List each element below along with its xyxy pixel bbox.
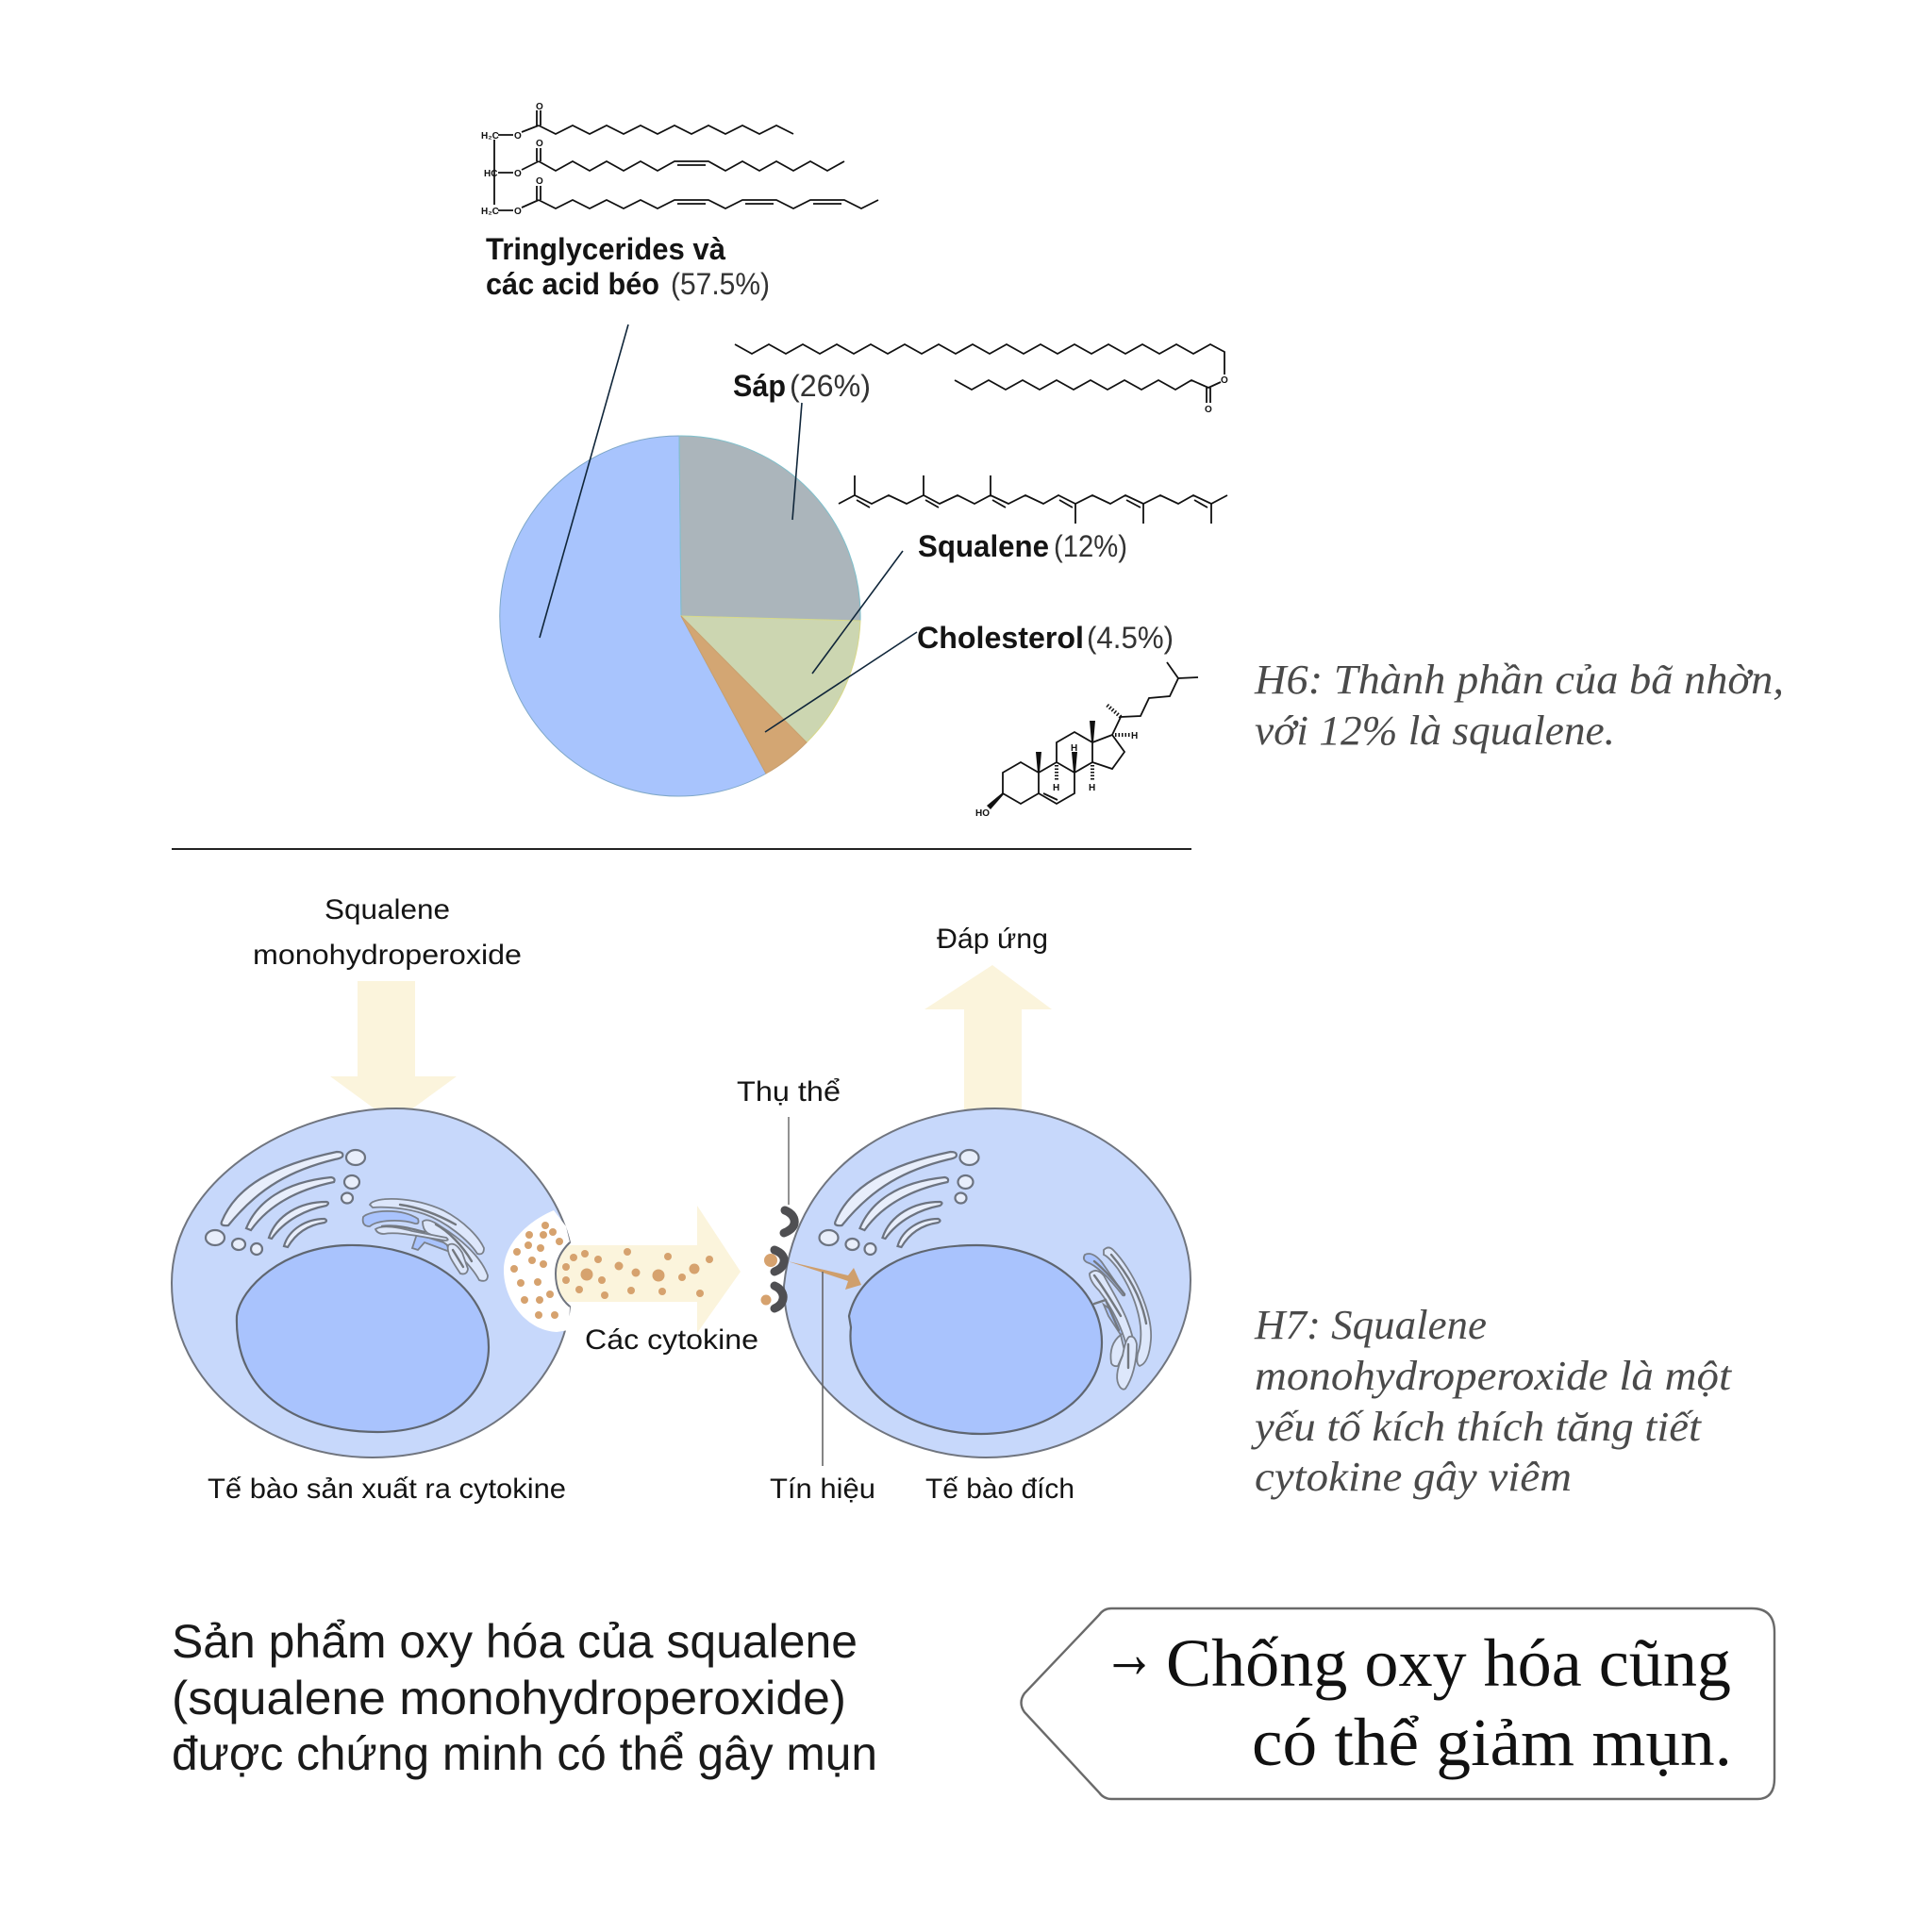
nucleus xyxy=(237,1245,489,1432)
slice: squalene 12% xyxy=(681,616,860,742)
chemical structure: cholesterol: H xyxy=(1071,743,1077,754)
leader lines xyxy=(540,325,917,732)
callout text: Chống oxy hóa cũng xyxy=(1166,1625,1731,1701)
golgi apparatus xyxy=(363,1199,488,1281)
caption: H6: với 12% là squalene. xyxy=(1255,708,1615,754)
label: triglycerides: các acid béo xyxy=(486,267,659,301)
callout text xyxy=(1103,1615,1732,1780)
label: wax xyxy=(733,369,871,403)
label: target cell: Tế bào đích xyxy=(925,1474,1074,1505)
slice: triglycerides 57.5% xyxy=(500,436,766,796)
receptors xyxy=(760,1210,794,1308)
cell body xyxy=(784,1108,1191,1457)
chemical structure: wax: O xyxy=(1221,375,1228,386)
chemical structure: cholesterol: H xyxy=(1053,783,1059,793)
label: squalene monohydroperoxide: Squalene xyxy=(325,894,450,925)
panel: sebum composition (H6) xyxy=(481,102,1784,819)
panel: cytokine signalling (H7) xyxy=(172,894,1733,1505)
label: signal: Tín hiệu xyxy=(770,1474,875,1505)
label: squalene xyxy=(918,529,1127,563)
arrow: response up xyxy=(924,965,1052,1123)
callout text: có thể giảm mụn. xyxy=(1252,1705,1732,1780)
callout text: → xyxy=(1103,1615,1156,1693)
arrow: cytokine release xyxy=(556,1206,741,1333)
cell: cytokine-producing xyxy=(172,1108,570,1457)
cytokine dots in arrow xyxy=(562,1248,713,1299)
caption: H7 xyxy=(1251,1302,1733,1500)
text block: conclusion: (squalene monohydroperoxide) xyxy=(172,1672,846,1724)
pie chart: sebum composition xyxy=(500,436,860,796)
cell body xyxy=(172,1108,570,1457)
text block: conclusion: được chứng minh có thể gây mụn xyxy=(172,1727,877,1780)
caption: H7: H7: Squalene xyxy=(1254,1302,1487,1348)
caption: H7: monohydroperoxide là một xyxy=(1255,1353,1733,1399)
chemical structure: squalene xyxy=(839,475,1227,524)
chemical structure: triglycerides: O xyxy=(514,169,522,179)
caption: H7: cytokine gây viêm xyxy=(1255,1454,1572,1500)
secretory vesicle xyxy=(504,1210,570,1332)
label: cytokines: Các cytokine xyxy=(585,1324,758,1356)
label: producing cell: Tế bào sản xuất ra cytokine xyxy=(208,1474,566,1505)
callout: antioxidant conclusion xyxy=(1021,1608,1774,1799)
chemical structure: triglycerides: O xyxy=(536,102,543,112)
label: triglycerides xyxy=(486,232,770,301)
label: triglycerides: (57.5%) xyxy=(671,267,770,301)
chemical structure: triglycerides: H₂C xyxy=(481,131,499,142)
label: squalene monohydroperoxide xyxy=(253,894,522,971)
pointer line: signal xyxy=(822,1272,824,1466)
caption: H6 xyxy=(1254,657,1784,754)
chemical structure: triglycerides: O xyxy=(536,176,543,187)
chemical structure: cholesterol: HO xyxy=(975,808,990,819)
label: receptor: Thụ thể xyxy=(737,1076,841,1108)
label: cholesterol: (4.5%) xyxy=(1087,621,1174,655)
chemical structure: triglycerides: O xyxy=(514,207,522,217)
label: cholesterol xyxy=(917,621,1174,655)
cytokine dots in vesicle xyxy=(510,1222,563,1319)
text block: conclusion xyxy=(172,1615,877,1780)
caption: H7: yếu tố kích thích tăng tiết xyxy=(1251,1404,1703,1450)
chemical structure: triglycerides: HC xyxy=(484,169,497,179)
label: wax: Sáp xyxy=(733,369,786,403)
chemical structure: cholesterol: H xyxy=(1089,783,1095,793)
text block: conclusion: Sản phẩm oxy hóa của squalene xyxy=(172,1615,858,1668)
nucleus xyxy=(849,1245,1102,1434)
slice: wax 26% xyxy=(679,436,860,621)
cell membrane notch xyxy=(556,1242,570,1307)
label: squalene monohydroperoxide: monohydroperoxide xyxy=(253,940,522,971)
label: cholesterol: Cholesterol xyxy=(917,621,1084,655)
chemical structure: triglycerides: O xyxy=(514,131,522,142)
pointer line: receptor xyxy=(788,1117,790,1205)
golgi apparatus xyxy=(1084,1247,1151,1390)
endoplasmic reticulum xyxy=(206,1150,365,1255)
label: squalene: (12%) xyxy=(1054,529,1127,563)
caption: H6: H6: Thành phần của bã nhờn, xyxy=(1254,657,1784,703)
chemical structure: triglycerides: O xyxy=(536,139,543,149)
label: squalene: Squalene xyxy=(918,529,1049,563)
chemical structure: wax: O xyxy=(1205,405,1212,415)
label: response: Đáp ứng xyxy=(937,924,1048,955)
callout outline xyxy=(1021,1608,1774,1799)
arrow: signal xyxy=(788,1261,861,1290)
cell: target xyxy=(784,1108,1191,1457)
slice: cholesterol 4.5% xyxy=(681,616,807,774)
arrow: input down xyxy=(330,981,457,1123)
chemical structure: cholesterol xyxy=(975,662,1198,819)
chemical structure: cholesterol: H xyxy=(1131,731,1138,741)
chemical structure: triglycerides xyxy=(481,102,878,217)
chemical structure: wax xyxy=(735,344,1228,415)
endoplasmic reticulum xyxy=(819,1150,979,1255)
label: triglycerides: Tringlycerides và xyxy=(486,232,725,266)
chemical structure: triglycerides: H₂C xyxy=(481,207,499,217)
label: wax: (26%) xyxy=(790,369,871,403)
